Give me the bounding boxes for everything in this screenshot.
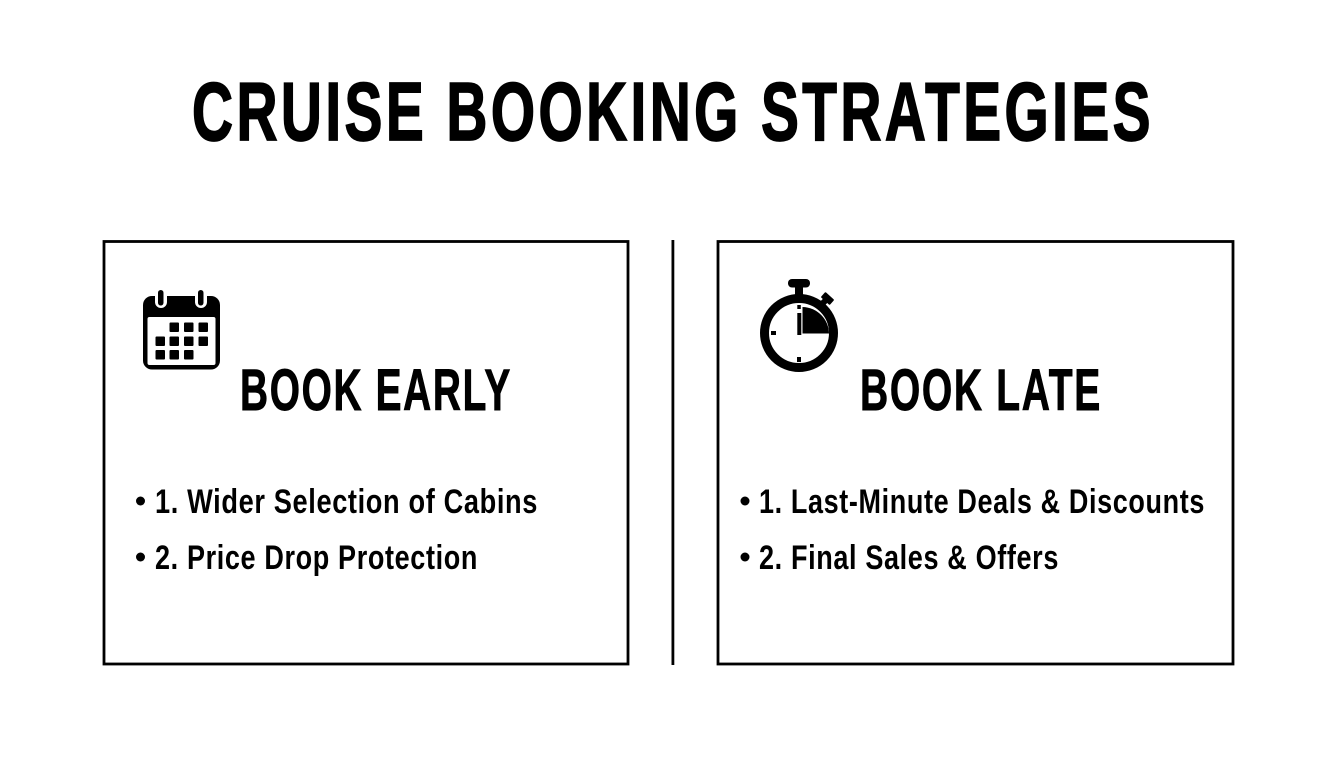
list: book late benefits [740,483,1205,577]
icon: calendar [143,288,220,370]
panel: book early [104,242,628,664]
list: book early benefits [136,483,538,577]
list: book early benefits: 1. Wider Selection of Cabins [155,483,538,521]
heading: book late: BOOK LATE [860,358,1102,423]
list: book late benefits: 1. Last-Minute Deals & Discounts [759,483,1205,521]
panel: book late [718,242,1233,664]
heading: book early: BOOK EARLY [240,358,512,423]
icon: stopwatch [764,279,834,368]
list: book early benefits: 2. Price Drop Protection [155,539,478,577]
list: book late benefits: 2. Final Sales & Offers [759,539,1059,577]
center divider [672,240,674,665]
